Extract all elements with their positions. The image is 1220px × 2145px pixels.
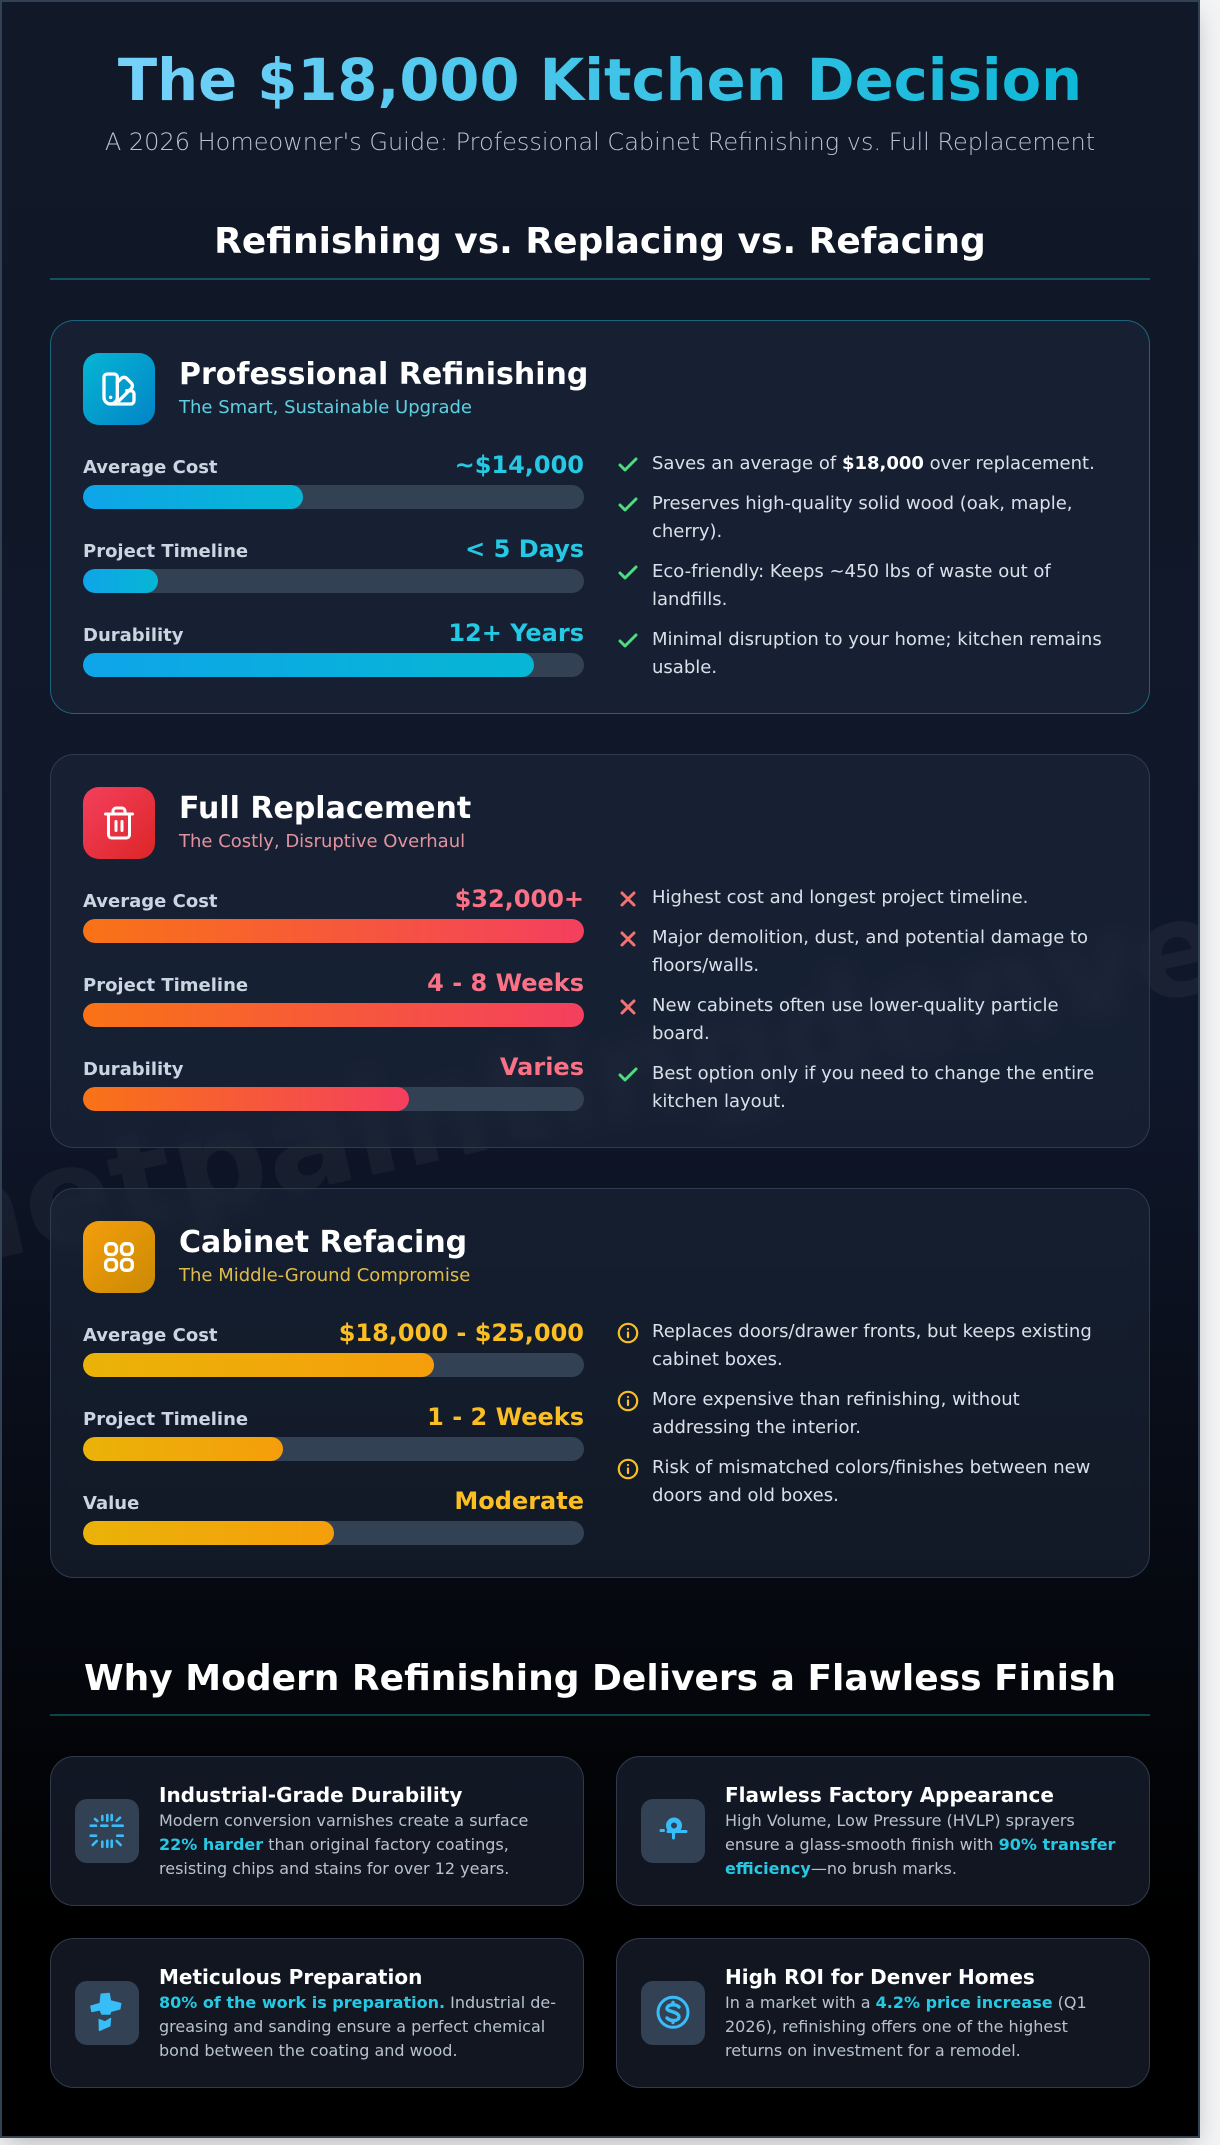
benefit text: [652, 1063, 1094, 1112]
bar: project timeline: [83, 1437, 584, 1461]
title: The $18,000 Kitchen Decision: [118, 47, 1082, 114]
drawback text: Major demolition, dust, and potential damage to: [652, 927, 1088, 948]
panel title: Full Replacement: [179, 791, 471, 826]
drawback text: [652, 927, 1088, 976]
metric label: average cost: Average Cost: [83, 891, 218, 912]
icon: info: [618, 1390, 638, 1412]
icon: info: [618, 1458, 638, 1480]
bar: project timeline: [83, 1003, 584, 1027]
drawback text: board.: [652, 1023, 710, 1044]
icon: check: [618, 1067, 638, 1082]
bar: average cost: [83, 1353, 584, 1377]
icon: check: [618, 565, 638, 580]
icon: dashed sunburst: [75, 1799, 139, 1863]
feature text: greasing and sanding ensure a perfect chemical: [159, 2017, 545, 2036]
metric label: average cost: Average Cost: [83, 457, 218, 478]
icon: swatch book: [83, 353, 155, 425]
metric label: average cost: Average Cost: [83, 1325, 218, 1346]
panel subtitle: The Smart, Sustainable Upgrade: [179, 397, 472, 418]
feature text: [725, 1811, 1116, 1878]
drawback text: Highest cost and longest project timeline.: [652, 887, 1028, 908]
panel subtitle: The Costly, Disruptive Overhaul: [179, 831, 465, 852]
benefit text: usable.: [652, 657, 717, 678]
panel: cabinet refacing: [50, 1188, 1150, 1578]
benefit text: Minimal disruption to your home; kitchen remains: [652, 629, 1102, 650]
panel title: Professional Refinishing: [179, 357, 588, 392]
bar: average cost: [83, 919, 584, 943]
note text: Replaces doors/drawer fronts, but keeps existing: [652, 1321, 1092, 1342]
icon: cross: [620, 931, 636, 947]
feature title: Meticulous Preparation: [159, 1965, 422, 1989]
benefit text: Saves an average of $18,000 over replacement.: [652, 453, 1095, 474]
icon: check: [618, 457, 638, 472]
feature text: 2026), refinishing offers one of the highest: [725, 2017, 1068, 2036]
note text: More expensive than refinishing, without: [652, 1389, 1020, 1410]
drawback text: New cabinets often use lower-quality particle: [652, 995, 1059, 1016]
metric value: project timeline: 4 - 8 Weeks: [427, 969, 584, 997]
feature text: In a market with a 4.2% price increase (Q1: [725, 1993, 1087, 2012]
feature title: Industrial-Grade Durability: [159, 1783, 462, 1807]
feature title: High ROI for Denver Homes: [725, 1965, 1035, 1989]
benefit text: landfills.: [652, 589, 727, 610]
icon: four squares: [83, 1221, 155, 1293]
icon: spray gun: [641, 1799, 705, 1863]
benefit text: [652, 493, 1072, 542]
panel: industrial-grade durability: [50, 1756, 584, 1906]
icon: info: [618, 1322, 638, 1344]
icon: dollar circle: [641, 1981, 705, 2045]
feature text: ensure a glass-smooth finish with 90% transfer: [725, 1835, 1115, 1854]
panel title: Cabinet Refacing: [179, 1225, 467, 1260]
metric value: durability: 12+ Years: [448, 619, 584, 647]
metric label: value: Value: [83, 1493, 139, 1514]
drawback text: floors/walls.: [652, 955, 759, 976]
feature text: bond between the coating and wood.: [159, 2041, 458, 2060]
bar: durability: [83, 1087, 584, 1111]
metric value: average cost: $18,000 - $25,000: [339, 1319, 584, 1347]
feature text: Modern conversion varnishes create a surface: [159, 1811, 528, 1830]
note text: doors and old boxes.: [652, 1485, 839, 1506]
drawback text: [652, 995, 1059, 1044]
panel subtitle: The Middle-Ground Compromise: [179, 1265, 470, 1286]
feature text: efficiency—no brush marks.: [725, 1859, 957, 1878]
icon: cross: [620, 891, 636, 907]
note text: cabinet boxes.: [652, 1349, 783, 1370]
metric label: project timeline: Project Timeline: [83, 975, 248, 996]
benefit text: Eco-friendly: Keeps ~450 lbs of waste out of: [652, 561, 1051, 582]
bar: average cost: [83, 485, 584, 509]
benefit text: [652, 561, 1052, 610]
benefit text: [652, 629, 1102, 678]
metric value: average cost: ~$14,000: [455, 451, 584, 479]
note text: [652, 1389, 1020, 1438]
feature text: resisting chips and stains for over 12 years.: [159, 1859, 509, 1878]
metric value: project timeline: < 5 Days: [465, 535, 584, 563]
heading: why section: Why Modern Refinishing Delivers a Flawless Finish: [84, 1658, 1116, 1699]
feature text: [159, 1993, 556, 2060]
benefit text: Best option only if you need to change the entire: [652, 1063, 1094, 1084]
feature text: 80% of the work is preparation. Industrial de-: [159, 1993, 556, 2012]
bar: project timeline: [83, 569, 584, 593]
metric label: durability: Durability: [83, 625, 184, 646]
panel: high ROI for Denver homes: [616, 1938, 1150, 2088]
note text: [652, 1457, 1090, 1506]
feature text: High Volume, Low Pressure (HVLP) sprayers: [725, 1811, 1075, 1830]
panel: meticulous preparation: [50, 1938, 584, 2088]
metric value: project timeline: 1 - 2 Weeks: [427, 1403, 584, 1431]
icon: trash can: [83, 787, 155, 859]
feature text: 22% harder than original factory coatings,: [159, 1835, 509, 1854]
metric label: durability: Durability: [83, 1059, 184, 1080]
metric label: project timeline: Project Timeline: [83, 1409, 248, 1430]
metric value: durability: Varies: [500, 1053, 584, 1081]
feature title: Flawless Factory Appearance: [725, 1783, 1054, 1807]
note text: Risk of mismatched colors/finishes between new: [652, 1457, 1090, 1478]
metric value: average cost: $32,000+: [455, 885, 584, 913]
bar: value: [83, 1521, 584, 1545]
feature text: [725, 1993, 1087, 2060]
icon: plus and chevron: [75, 1981, 139, 2045]
benefit text: Preserves high-quality solid wood (oak, maple,: [652, 493, 1072, 514]
bar: durability: [83, 653, 584, 677]
benefit text: cherry).: [652, 521, 722, 542]
note text: [652, 1321, 1092, 1370]
metric value: value: Moderate: [454, 1487, 584, 1515]
feature text: returns on investment for a remodel.: [725, 2041, 1021, 2060]
icon: check: [618, 497, 638, 512]
panel: full replacement: [50, 754, 1150, 1148]
icon: cross: [620, 999, 636, 1015]
panel: professional refinishing: [50, 320, 1150, 714]
subtitle: A 2026 Homeowner's Guide: Professional Cabinet Refinishing vs. Full Replacement: [105, 128, 1095, 156]
note text: addressing the interior.: [652, 1417, 861, 1438]
feature text: [159, 1811, 528, 1878]
heading: comparison section: Refinishing vs. Replacing vs. Refacing: [214, 221, 986, 262]
panel: flawless factory appearance: [616, 1756, 1150, 1906]
icon: check: [618, 633, 638, 648]
metric label: project timeline: Project Timeline: [83, 541, 248, 562]
benefit text: kitchen layout.: [652, 1091, 786, 1112]
